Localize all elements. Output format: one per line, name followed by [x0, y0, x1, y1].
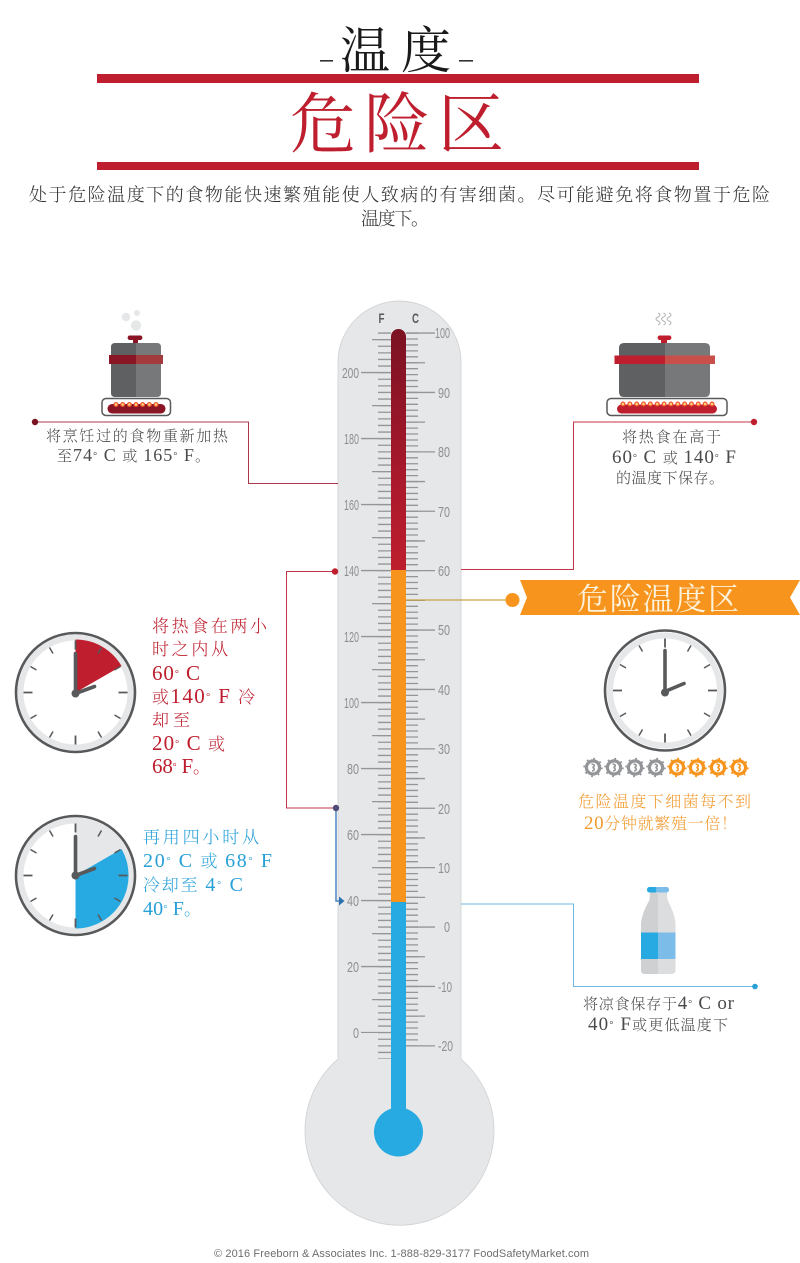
- title bottom rule: [97, 162, 699, 170]
- text: two hour cooling: 68: [152, 754, 193, 778]
- fahrenheit labels: 40: [347, 893, 359, 910]
- fahrenheit labels: 0: [353, 1025, 359, 1042]
- text: reheat instruction: 至74: [57, 445, 92, 465]
- text: two hour cooling: 20: [152, 731, 207, 755]
- connector: cooling bracket: [286, 568, 338, 808]
- icon: hot holding pot: [607, 313, 727, 416]
- text: two hour cooling: 时之内从: [152, 640, 228, 659]
- text: reheat instruction: [46, 428, 228, 465]
- fahrenheit ticks: [376, 332, 384, 1059]
- icon: milk bottle: [641, 887, 676, 974]
- text: hot holding instruction: °: [633, 453, 637, 464]
- text: four hour cooling: °: [248, 856, 252, 867]
- text: reheat instruction: 。: [195, 449, 210, 465]
- text: cold holding instruction: C or: [693, 993, 735, 1014]
- title top rule: [97, 74, 699, 83]
- fahrenheit labels: 80: [347, 761, 359, 778]
- text: two hour cooling: F: [212, 684, 237, 708]
- celsius labels: -10: [438, 979, 452, 996]
- celsius labels: 60: [438, 563, 450, 580]
- text: hot holding instruction: 的温度下保存。: [616, 469, 724, 487]
- mercury: danger section: [391, 570, 406, 903]
- celsius labels: 70: [438, 504, 450, 521]
- celsius labels: 0: [444, 919, 450, 936]
- fahrenheit labels: 60: [347, 827, 359, 844]
- text: two hour cooling: C: [180, 731, 207, 755]
- text: two hour cooling: °: [173, 762, 177, 773]
- fahrenheit labels: 200: [342, 365, 359, 382]
- connector: cold holding: [461, 904, 758, 989]
- footer: © 2016 Freeborn & Associates Inc. 1-888-829-3177 FoodSafetyMarket.com: [214, 1248, 589, 1260]
- text: two hour cooling: F: [176, 754, 193, 778]
- celsius labels: 40: [438, 682, 450, 699]
- mercury: hot section: [391, 329, 406, 571]
- text: bacteria doubling: 20分钟就繁殖一倍！: [584, 813, 737, 834]
- celsius labels: [435, 325, 453, 1055]
- text: four hour cooling: °: [217, 880, 221, 891]
- text: two hour cooling: 却至: [152, 711, 190, 730]
- text: cold holding instruction: 将凉食保存于4: [583, 993, 687, 1014]
- celsius labels: 20: [438, 801, 450, 818]
- text: four hour cooling: °: [163, 904, 167, 915]
- text: cold holding instruction: [583, 993, 735, 1035]
- text: cold holding instruction: 40: [588, 1014, 631, 1035]
- banner: danger temperature zone: 危险温度区: [577, 582, 739, 617]
- fahrenheit labels: [342, 365, 359, 1042]
- text: two hour cooling: 冷: [238, 688, 255, 707]
- text: two hour cooling: °: [175, 669, 179, 680]
- intro text: 处于危险温度下的食物能快速繁殖能使人致病的有害细菌。尽可能避免将食物置于危险: [29, 185, 770, 205]
- fahrenheit labels: 20: [347, 959, 359, 976]
- text: four hour cooling: C: [223, 874, 243, 896]
- text: four hour cooling: 再用四小时从: [143, 828, 259, 847]
- text: hot holding instruction: 或 140: [663, 447, 714, 468]
- text: four hour cooling: F: [254, 850, 272, 872]
- icon: reheating pot: [102, 310, 170, 416]
- celsius labels: 80: [438, 444, 450, 461]
- text: bacteria doubling: 危险温度下细菌每不到: [578, 792, 751, 811]
- text: reheat instruction: C: [98, 445, 121, 465]
- text: hot holding instruction: 将热食在高于: [622, 428, 721, 446]
- text: four hour cooling: 或 68: [200, 850, 247, 872]
- connector: hot holding: [461, 419, 757, 570]
- text: two hour cooling: °: [175, 739, 179, 750]
- clock: bacteria doubling: [605, 630, 725, 750]
- text: reheat instruction: 或 165: [122, 445, 172, 465]
- intro text: 温度下。: [361, 209, 429, 229]
- text: two hour cooling: C: [180, 661, 200, 685]
- blue four-hour sector: [76, 849, 129, 929]
- title: danger zone: 危险区: [290, 89, 504, 162]
- title: temperature: 温度: [340, 23, 451, 79]
- fahrenheit labels: 160: [344, 497, 359, 514]
- text: hot holding instruction: [612, 428, 736, 487]
- celsius ticks: [412, 332, 420, 1047]
- text: bacteria doubling: [578, 792, 751, 834]
- text: two hour cooling: 60: [152, 661, 200, 685]
- banner: danger temperature zone: [520, 580, 800, 617]
- clock: four hour cooling: [16, 816, 135, 935]
- celsius labels: -20: [438, 1038, 453, 1055]
- red two-hour sector: [76, 639, 122, 692]
- celsius labels: 10: [438, 860, 450, 877]
- fahrenheit labels: 100: [344, 695, 359, 712]
- text: four hour cooling: [143, 828, 272, 920]
- icons: bacteria counter: [584, 759, 748, 776]
- text: reheat instruction: °: [93, 451, 97, 462]
- connector: cooling arrow: [333, 805, 344, 906]
- thermometer: [305, 301, 494, 1225]
- text: four hour cooling: F: [168, 898, 184, 920]
- text: cold holding instruction: 或更低温度下: [632, 1018, 728, 1034]
- celsius labels: 30: [438, 741, 450, 758]
- text: cold holding instruction: °: [609, 1020, 613, 1031]
- text: hot holding instruction: °: [715, 453, 719, 464]
- intro text: [29, 185, 770, 229]
- text: cold holding instruction: F: [614, 1014, 631, 1035]
- connector: reheat: [32, 419, 338, 484]
- text: cold holding instruction: °: [688, 999, 692, 1010]
- text: reheat instruction: 将烹饪过的食物重新加热: [46, 428, 228, 445]
- text: four hour cooling: C: [172, 850, 199, 872]
- text: hot holding instruction: 60: [612, 447, 662, 468]
- scale headings: C: [412, 310, 419, 326]
- fahrenheit labels: 120: [344, 629, 359, 646]
- danger zone pointer: [406, 593, 520, 607]
- fahrenheit labels: 140: [344, 563, 359, 580]
- text: four hour cooling: 。: [184, 900, 201, 919]
- text: two hour cooling: 或: [208, 735, 225, 754]
- celsius labels: 50: [438, 622, 450, 639]
- fahrenheit labels: 180: [344, 431, 359, 448]
- text: two hour cooling: 将热食在两小: [152, 617, 268, 636]
- text: reheat instruction: °: [173, 451, 177, 462]
- celsius labels: 100: [435, 325, 450, 342]
- scale headings: [378, 310, 419, 326]
- text: two hour cooling: 或140: [152, 684, 205, 708]
- grey elapsed sector: [76, 822, 122, 876]
- text: reheat instruction: F: [178, 445, 194, 465]
- text: hot holding instruction: F: [720, 447, 736, 468]
- clock: two hour cooling: [16, 633, 135, 752]
- text: four hour cooling: 冷却至 4: [143, 874, 215, 896]
- mercury: cold section and bulb: [374, 902, 423, 1156]
- scale headings: F: [378, 310, 385, 326]
- thermometer body: [305, 301, 494, 1225]
- text: hot holding instruction: C: [638, 447, 662, 468]
- text: four hour cooling: 40: [143, 898, 184, 920]
- text: four hour cooling: °: [166, 856, 170, 867]
- text: four hour cooling: 20: [143, 850, 199, 872]
- text: two hour cooling: 。: [193, 758, 210, 777]
- text: two hour cooling: °: [206, 692, 210, 703]
- text: two hour cooling: [152, 617, 268, 778]
- celsius labels: 90: [438, 385, 450, 402]
